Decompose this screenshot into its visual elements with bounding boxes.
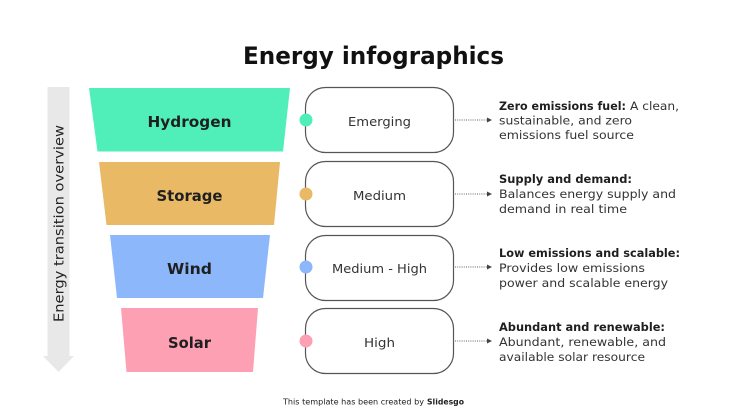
- row: solar: [121, 308, 666, 374]
- description: wind: [499, 246, 680, 290]
- status box: medium: [306, 162, 454, 226]
- funnel segment: storage: Storage: [156, 187, 222, 205]
- status box: medium-high: [306, 236, 454, 300]
- description: solar: Abundant and renewable:: [499, 320, 665, 334]
- status box: medium: Medium: [353, 189, 406, 203]
- description: wind: power and scalable energy: [499, 276, 668, 290]
- footer credit: Slidesgo: [427, 398, 464, 406]
- description: storage: [499, 172, 676, 216]
- arrow: storage connector: [455, 193, 491, 195]
- description: hydrogen: emissions fuel source: [499, 128, 634, 142]
- status box: emerging: [306, 88, 454, 152]
- funnel segment: wind: [110, 235, 270, 298]
- description: storage: demand in real time: [499, 202, 627, 216]
- arrow: solar connector: [455, 340, 491, 342]
- description: solar: [499, 320, 666, 364]
- arrow label: Energy transition overview: [52, 125, 68, 322]
- footer credit: This template has been created by: [282, 398, 425, 406]
- funnel segment: hydrogen: Hydrogen: [148, 113, 232, 131]
- description: wind: Provides low emissions: [499, 261, 645, 275]
- arrow: hydrogen connector: [455, 119, 491, 121]
- funnel segment: hydrogen: [89, 88, 290, 152]
- description: hydrogen: sustainable, and zero: [499, 114, 632, 128]
- description: hydrogen: A clean,: [630, 99, 679, 113]
- row: hydrogen: [89, 88, 679, 152]
- description: storage: Supply and demand:: [499, 172, 632, 186]
- funnel segment: wind: Wind: [167, 260, 212, 278]
- status box: emerging: Emerging: [348, 115, 411, 129]
- arrow: energy transition overview: [43, 87, 74, 372]
- dot: storage: [300, 188, 312, 200]
- row: storage: [99, 162, 676, 226]
- title: Energy infographics: [243, 42, 504, 70]
- dot: wind: [300, 260, 312, 274]
- description: hydrogen: Zero emissions fuel:: [499, 99, 626, 113]
- description: storage: Balances energy supply and: [499, 187, 676, 201]
- dot: hydrogen: [300, 114, 312, 126]
- funnel segment: solar: [121, 308, 258, 372]
- funnel segment: storage: [99, 162, 280, 225]
- arrow: wind connector: [455, 266, 491, 268]
- status box: high: [306, 308, 454, 374]
- description: solar: available solar resource: [499, 350, 645, 364]
- status box: medium-high: Medium - High: [332, 262, 427, 276]
- row: wind: [110, 235, 680, 300]
- description: wind: Low emissions and scalable:: [499, 246, 680, 260]
- description: solar: Abundant, renewable, and: [499, 335, 666, 349]
- status box: high: High: [364, 336, 395, 350]
- dot: solar: [300, 334, 312, 348]
- funnel segment: solar: Solar: [168, 334, 212, 352]
- description: hydrogen: [499, 99, 679, 142]
